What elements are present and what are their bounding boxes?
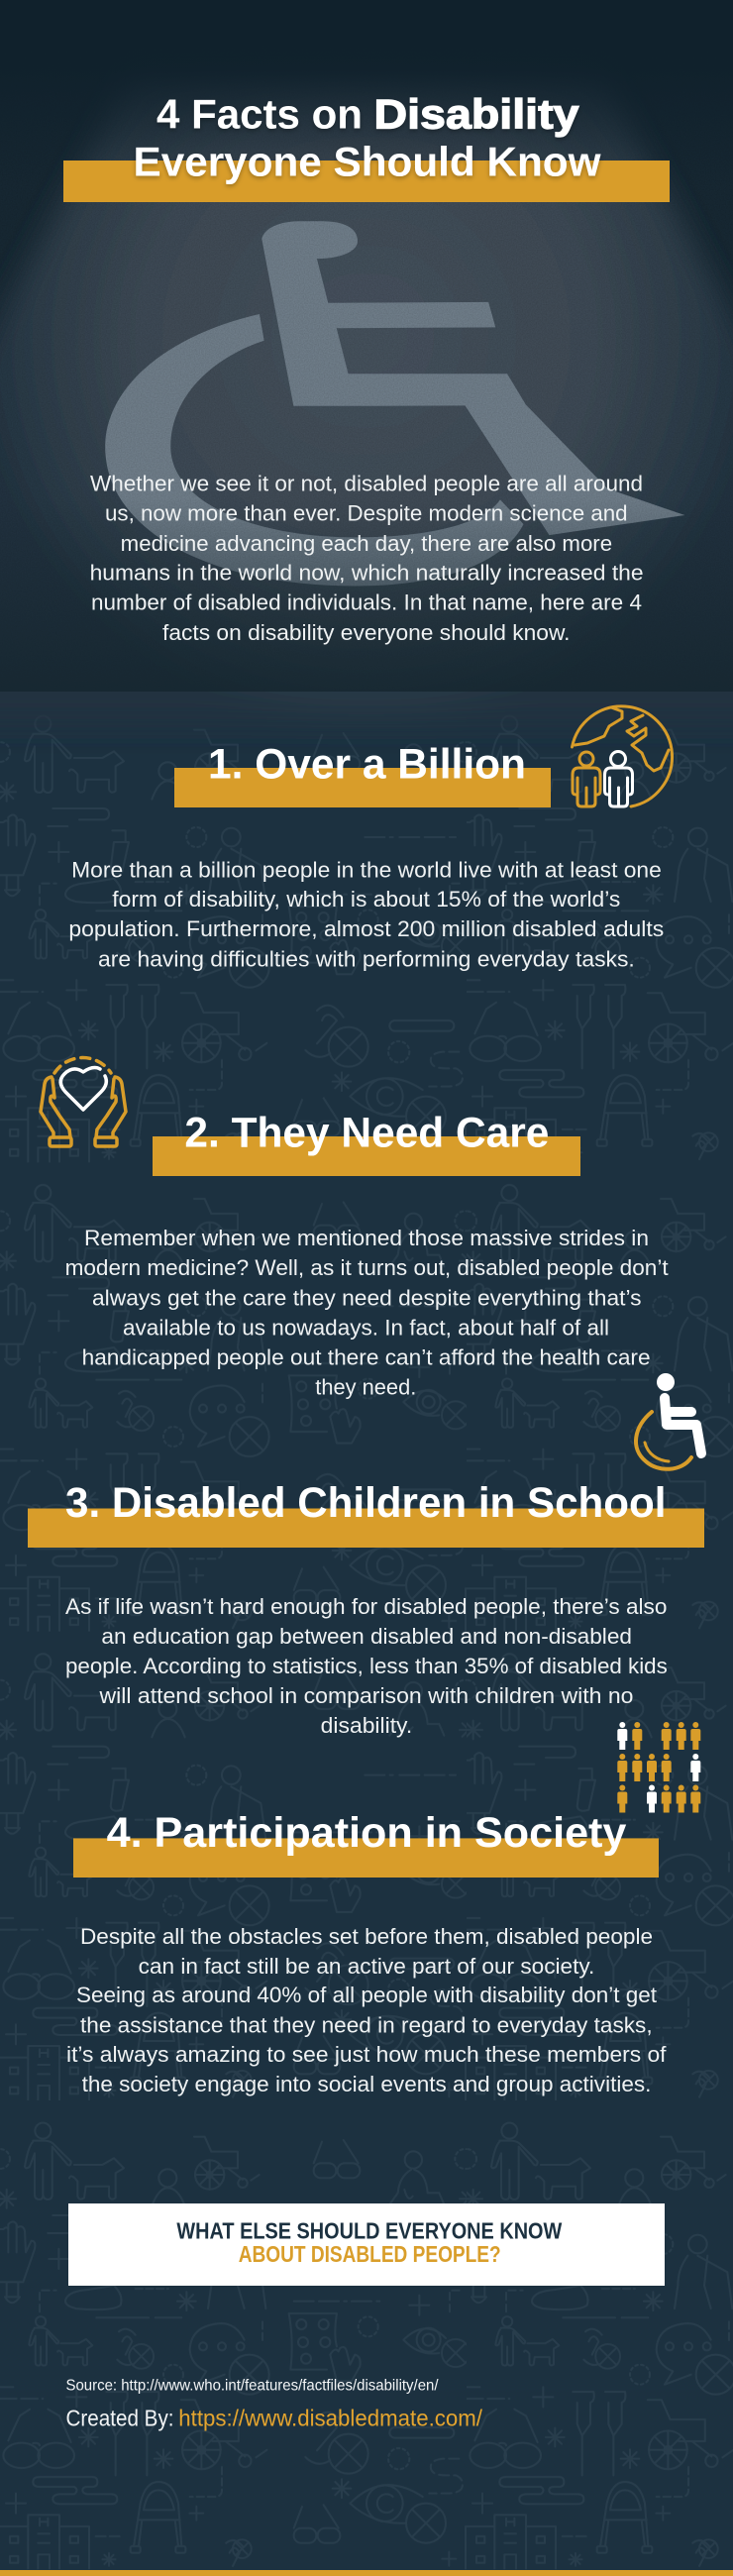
body text: Remember when we mentioned those massive strides in: [84, 1226, 649, 1250]
icon: wheelchair user: [636, 1373, 701, 1469]
intro paragraph: medicine advancing each day, there are also more: [121, 531, 612, 556]
heading band: [174, 768, 551, 807]
body text: modern medicine? Well, as it turns out, disabled people don’t: [65, 1255, 669, 1280]
body text: form of disability, which is about 15% of the world’s: [112, 887, 620, 912]
body text: are having difficulties with performing everyday tasks.: [98, 946, 635, 971]
body text: it’s always amazing to see just how much these members of: [66, 2042, 667, 2067]
panel: fact 1: [68, 706, 673, 971]
heading band: [28, 1508, 704, 1548]
body text: can in fact still be an active part of our society.: [139, 1954, 594, 1979]
body text: disability.: [321, 1713, 412, 1738]
body text: handicapped people out there can’t afford the health care: [82, 1345, 651, 1370]
body text: More than a billion people in the world live with at least one: [71, 857, 662, 882]
heading band: [73, 1838, 659, 1878]
body text: the society engage into social events and group activities.: [82, 2072, 651, 2096]
callout: closing question: [68, 2203, 665, 2286]
panel: fact 4: [66, 1809, 667, 2096]
body text: As if life wasn’t hard enough for disabled people, there’s also: [65, 1594, 667, 1619]
intro paragraph: number of disabled individuals. In that name, here are 4: [91, 590, 642, 615]
callout: closing question: ABOUT DISABLED PEOPLE?: [239, 2241, 501, 2267]
title: 4 Facts on: [157, 91, 363, 137]
body text: an education gap between disabled and non-disabled: [101, 1624, 632, 1649]
bottom gold bar: [0, 2570, 733, 2576]
photo: asphalt with painted wheelchair symbol: [0, 0, 733, 723]
body text: Seeing as around 40% of all people with disability don’t get: [76, 1983, 657, 2007]
title: Disability: [374, 91, 579, 137]
heading: 4. Participation in Society: [107, 1809, 626, 1857]
body text: always get the care they need despite everything that’s: [92, 1285, 642, 1310]
title: [133, 91, 601, 185]
body text: the assistance that they need in regard to everyday tasks,: [80, 2012, 653, 2037]
credit line: Created By:: [65, 2406, 174, 2431]
icon: globe and people: [573, 706, 673, 806]
intro paragraph: facts on disability everyone should know.: [162, 620, 571, 645]
callout: closing question: WHAT ELSE SHOULD EVERYONE KNOW: [176, 2217, 563, 2243]
panel: fact 3: [28, 1479, 704, 1738]
icon: group of people figures: [617, 1722, 700, 1813]
heading: 2. They Need Care: [184, 1110, 549, 1157]
body text: will attend school in comparison with children with no: [98, 1683, 634, 1708]
intro paragraph: [90, 472, 644, 645]
body text: [68, 857, 664, 971]
intro paragraph: Whether we see it or not, disabled people are all around: [90, 472, 643, 495]
intro paragraph: us, now more than ever. Despite modern science and: [105, 501, 628, 525]
credit line: https://www.disabledmate.com/: [178, 2406, 483, 2431]
body text: people. According to statistics, less than 35% of disabled kids: [65, 1654, 668, 1678]
title: Everyone Should Know: [133, 139, 601, 185]
body text: [66, 1924, 667, 2096]
body text: [65, 1594, 668, 1738]
heading band: [153, 1136, 580, 1176]
icon: hands holding heart: [41, 1058, 126, 1146]
body text: [65, 1226, 669, 1400]
heading: 1. Over a Billion: [208, 741, 526, 789]
body text: they need.: [315, 1375, 416, 1400]
intro paragraph: humans in the world now, which naturally increased the: [90, 561, 644, 586]
body text: population. Furthermore, almost 200 million disabled adults: [68, 916, 664, 941]
body text: Despite all the obstacles set before them, disabled people: [80, 1924, 653, 1949]
title highlight band: [63, 161, 670, 202]
panel: fact 2: [41, 1058, 669, 1400]
panel: hero photo with title and intro: [0, 0, 733, 723]
heading: 3. Disabled Children in School: [65, 1479, 666, 1527]
body text: available to us nowadays. In fact, about half of all: [123, 1315, 609, 1340]
source line: Source: http://www.who.int/features/factfiles/disability/en/: [65, 2378, 439, 2394]
